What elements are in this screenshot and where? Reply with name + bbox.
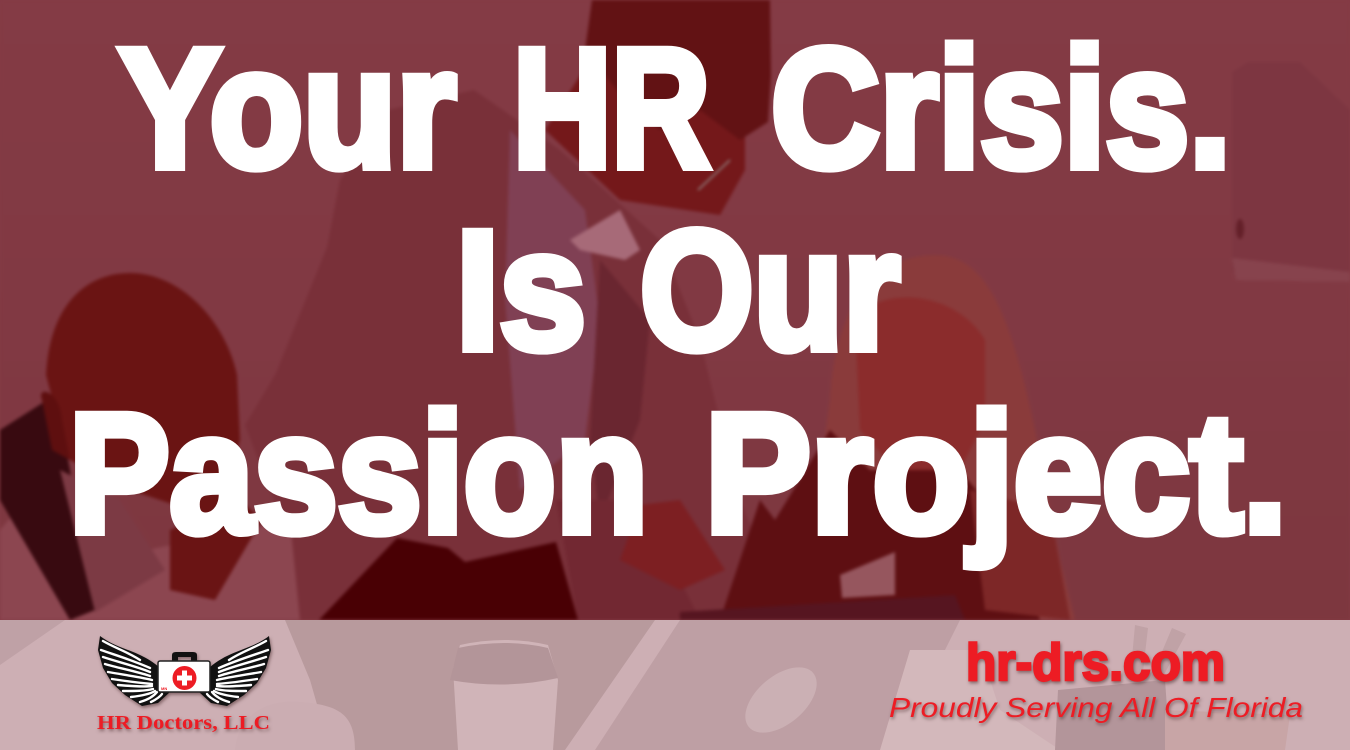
website: hr-drs.com (966, 634, 1225, 692)
band: desk items (880, 650, 1060, 750)
icon: winged medical case: MN (161, 686, 167, 691)
company name: HR Doctors, LLC (97, 712, 270, 734)
icon: winged medical case (98, 636, 271, 706)
title (69, 14, 1287, 568)
title line 2 (456, 196, 900, 384)
title line 1: Your (119, 14, 456, 202)
title line 1 (119, 14, 1231, 202)
logo: HR Doctors (97, 636, 271, 734)
seated man (0, 273, 300, 620)
tagline: Proudly Serving All Of Florida (889, 692, 1303, 723)
wall shelf (1232, 62, 1350, 282)
band: shirt shadow (0, 620, 65, 665)
title line 2: Is (456, 196, 586, 384)
title line 1: Crisis. (771, 14, 1231, 202)
band: coffee cup (450, 640, 558, 750)
title line 3: Passion (69, 378, 648, 568)
case handle (172, 652, 197, 661)
title line 3: Project. (705, 378, 1287, 568)
band: laptop (595, 620, 960, 750)
standing man (245, 0, 790, 620)
seated woman (680, 255, 1075, 620)
title line 1: HR (513, 14, 710, 202)
website and tagline (889, 634, 1303, 723)
bottom band (0, 620, 1350, 750)
title line 2: Our (640, 196, 900, 384)
band: coffee mug (235, 702, 355, 750)
case body (158, 661, 210, 692)
title line 3 (69, 378, 1287, 568)
red cross badge (172, 666, 196, 690)
